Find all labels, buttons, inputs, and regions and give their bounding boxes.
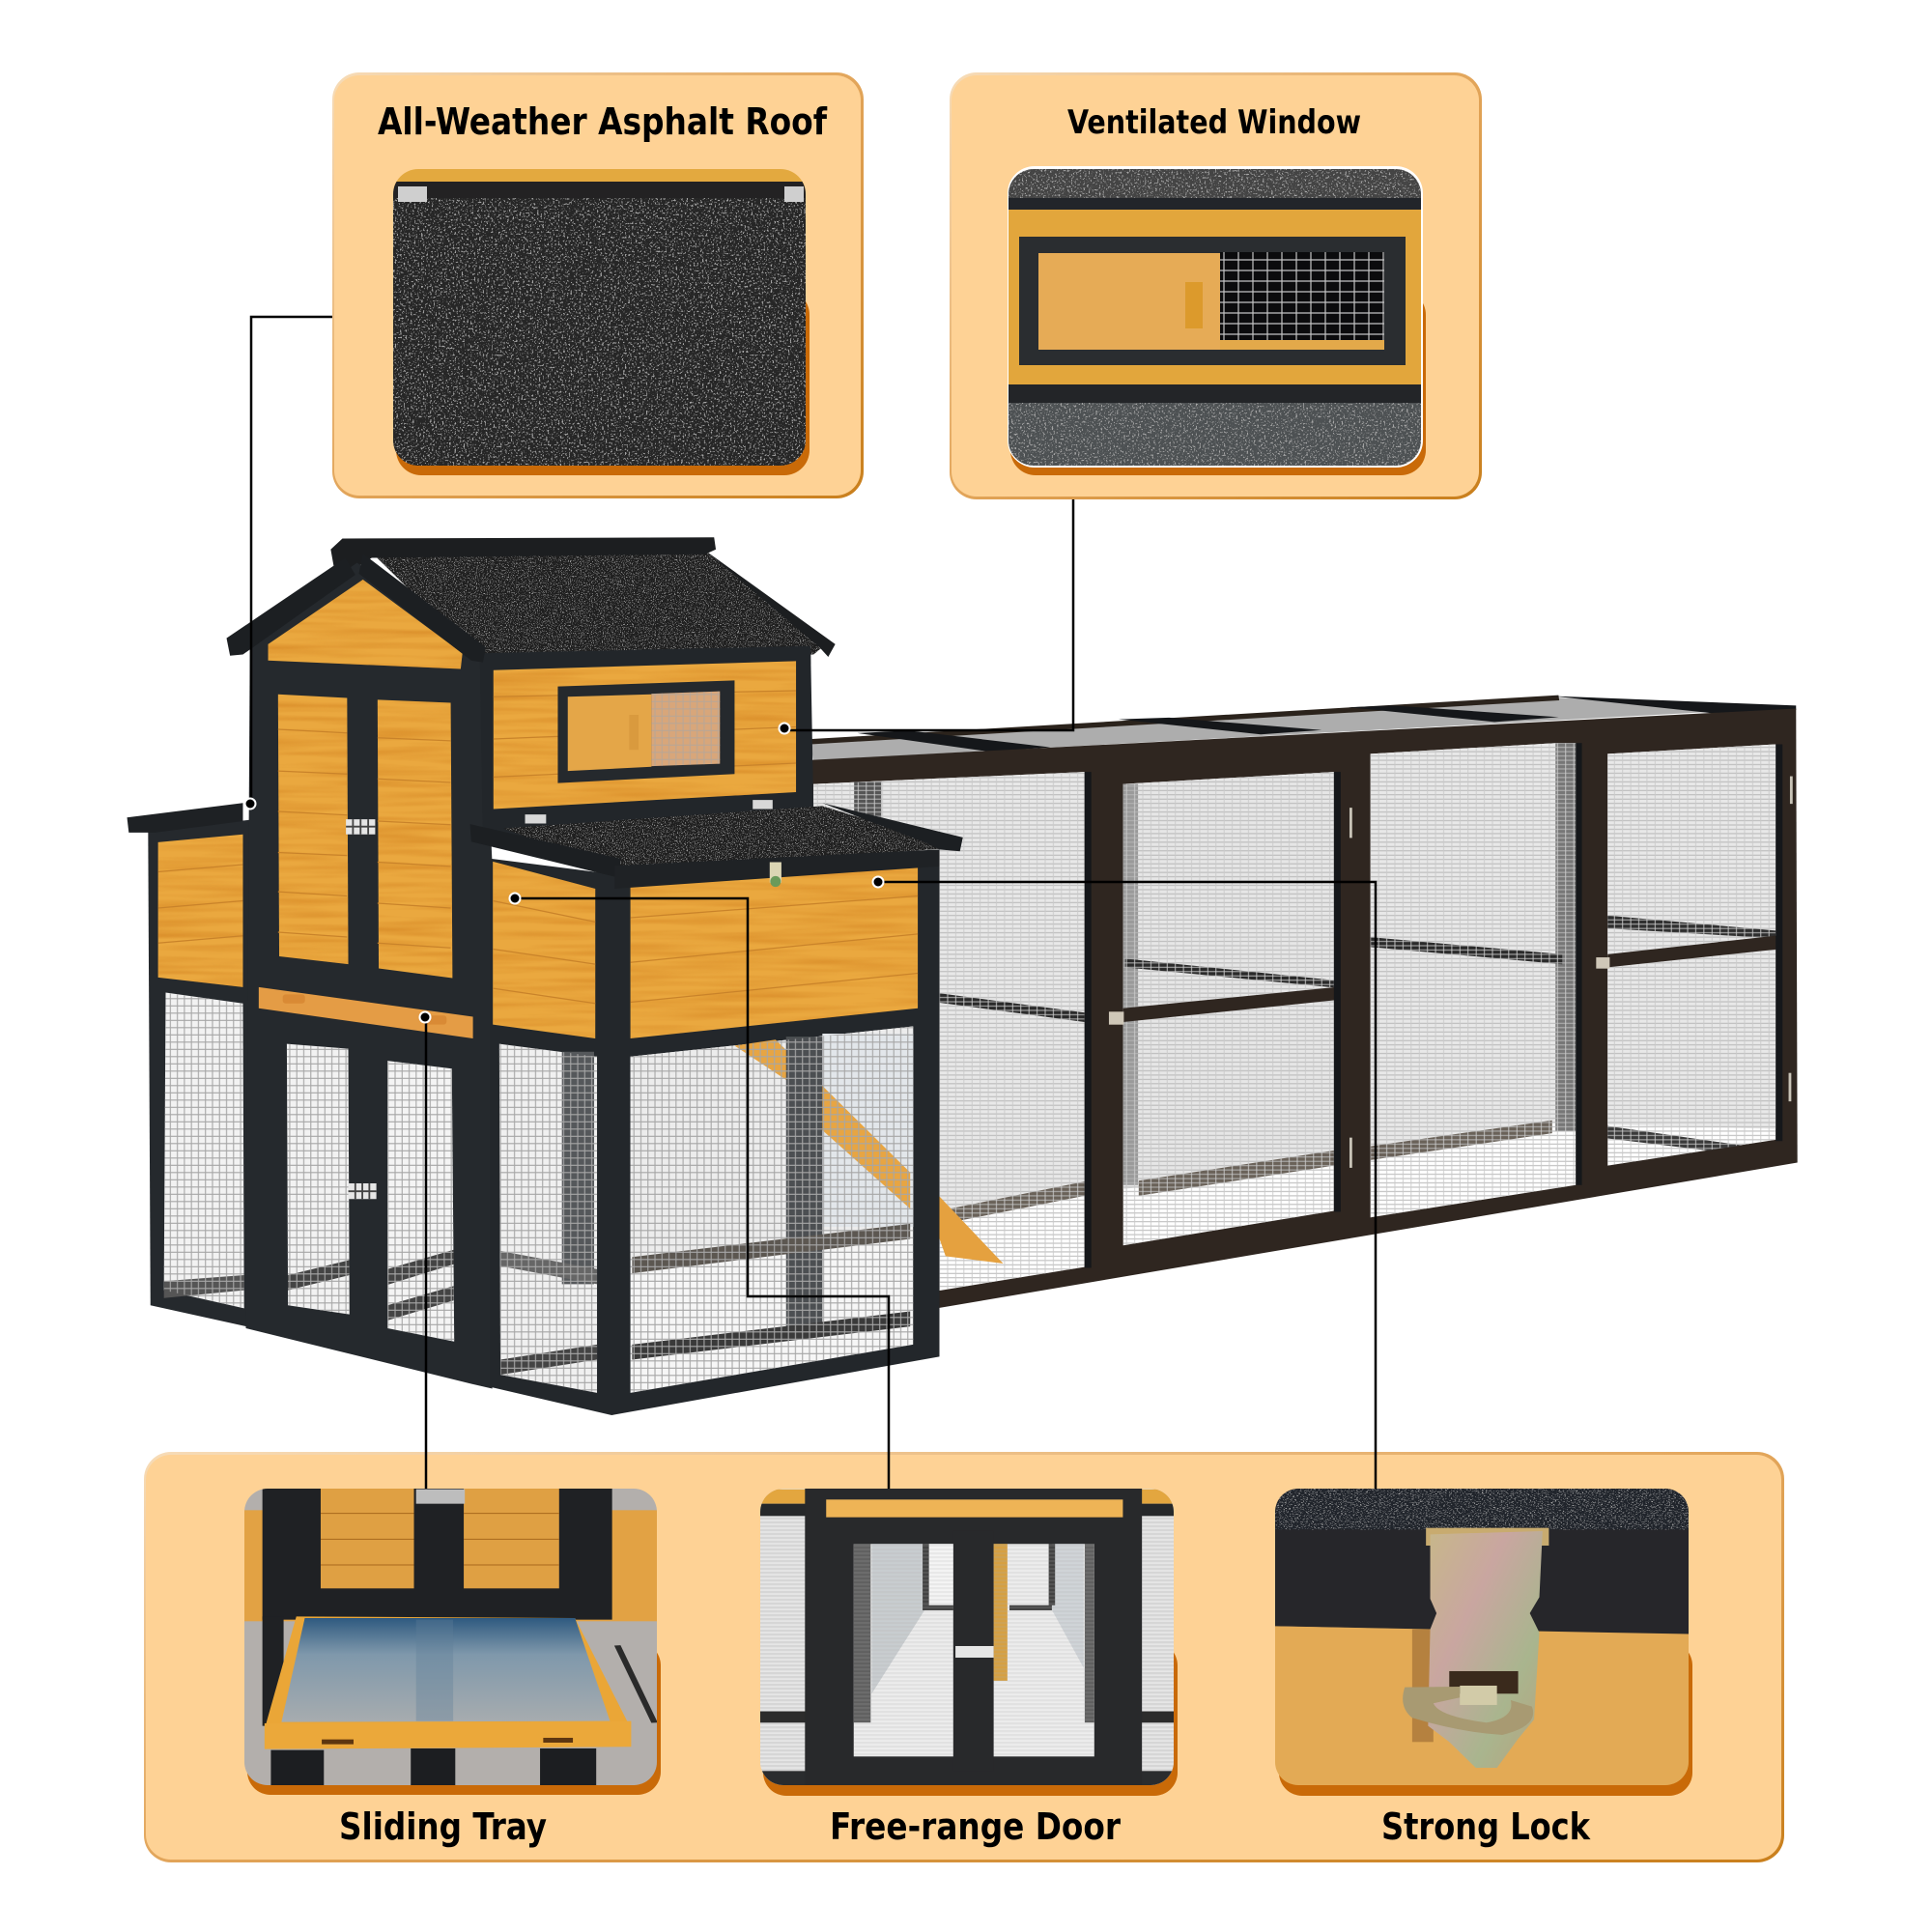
- run frame: [807, 708, 1798, 1308]
- photo: sliding tray: [242, 1488, 660, 1787]
- hutch front mesh: [631, 1026, 913, 1393]
- run panel 2: [1371, 743, 1582, 1217]
- caption: strong lock: Strong Lock: [1381, 1805, 1591, 1848]
- photo: strong lock: [1269, 1488, 1693, 1787]
- photo frame: [1008, 166, 1423, 468]
- hutch side wood: [493, 862, 595, 1038]
- ramp lower end: [939, 1196, 1004, 1264]
- upper door right: [378, 699, 452, 978]
- photo shadows: [247, 1642, 1692, 1796]
- door latch upper: [346, 819, 375, 835]
- upper door left: [278, 695, 349, 964]
- main roof: [330, 537, 836, 674]
- hutch lower enclosure: [490, 856, 939, 1415]
- photo shadow: [396, 290, 810, 475]
- photo shadow: [1010, 290, 1426, 475]
- run hinges: [1350, 777, 1793, 1168]
- callout line: roof: [245, 317, 332, 810]
- lock hasp: [770, 862, 781, 887]
- panel: ventilated window: [950, 72, 1482, 499]
- gable wood: [269, 580, 463, 668]
- heading: All-Weather Asphalt Roof: [378, 100, 828, 143]
- sliding tray handle: [259, 987, 473, 1038]
- hutch side mesh: [499, 1044, 597, 1393]
- panel: bottom features: [144, 1452, 1784, 1862]
- coop: [128, 537, 963, 1415]
- hutch front wood: [631, 867, 918, 1038]
- callout line: door: [510, 893, 889, 1489]
- run door 2: [1596, 745, 1782, 1166]
- photo: free-range door: [755, 1488, 1179, 1787]
- photo: asphalt: [393, 169, 806, 469]
- run top mesh: [810, 696, 1796, 760]
- caption: sliding tray: Sliding Tray: [339, 1805, 547, 1848]
- panel: all-weather asphalt roof: [332, 72, 864, 498]
- caption: free-range door: Free-range Door: [830, 1805, 1121, 1848]
- run door 1: [1109, 772, 1341, 1245]
- hutch roof: [470, 800, 963, 889]
- door latch lower: [349, 1183, 377, 1199]
- callout line: window: [779, 499, 1073, 734]
- run panel 1: [813, 772, 1092, 1310]
- callout line: lock: [873, 877, 1376, 1489]
- photo: window: [1009, 169, 1421, 469]
- heading: Ventilated Window: [1067, 103, 1361, 142]
- window: [557, 680, 734, 783]
- upper nest box: [480, 653, 813, 843]
- callout line: tray: [419, 1012, 431, 1489]
- left wing: [128, 803, 255, 1328]
- facade frame: [246, 562, 493, 1389]
- lower door left: [287, 1044, 350, 1315]
- gable trim: [227, 554, 486, 663]
- run enclosure: [807, 696, 1798, 1310]
- lower door right: [387, 1061, 454, 1342]
